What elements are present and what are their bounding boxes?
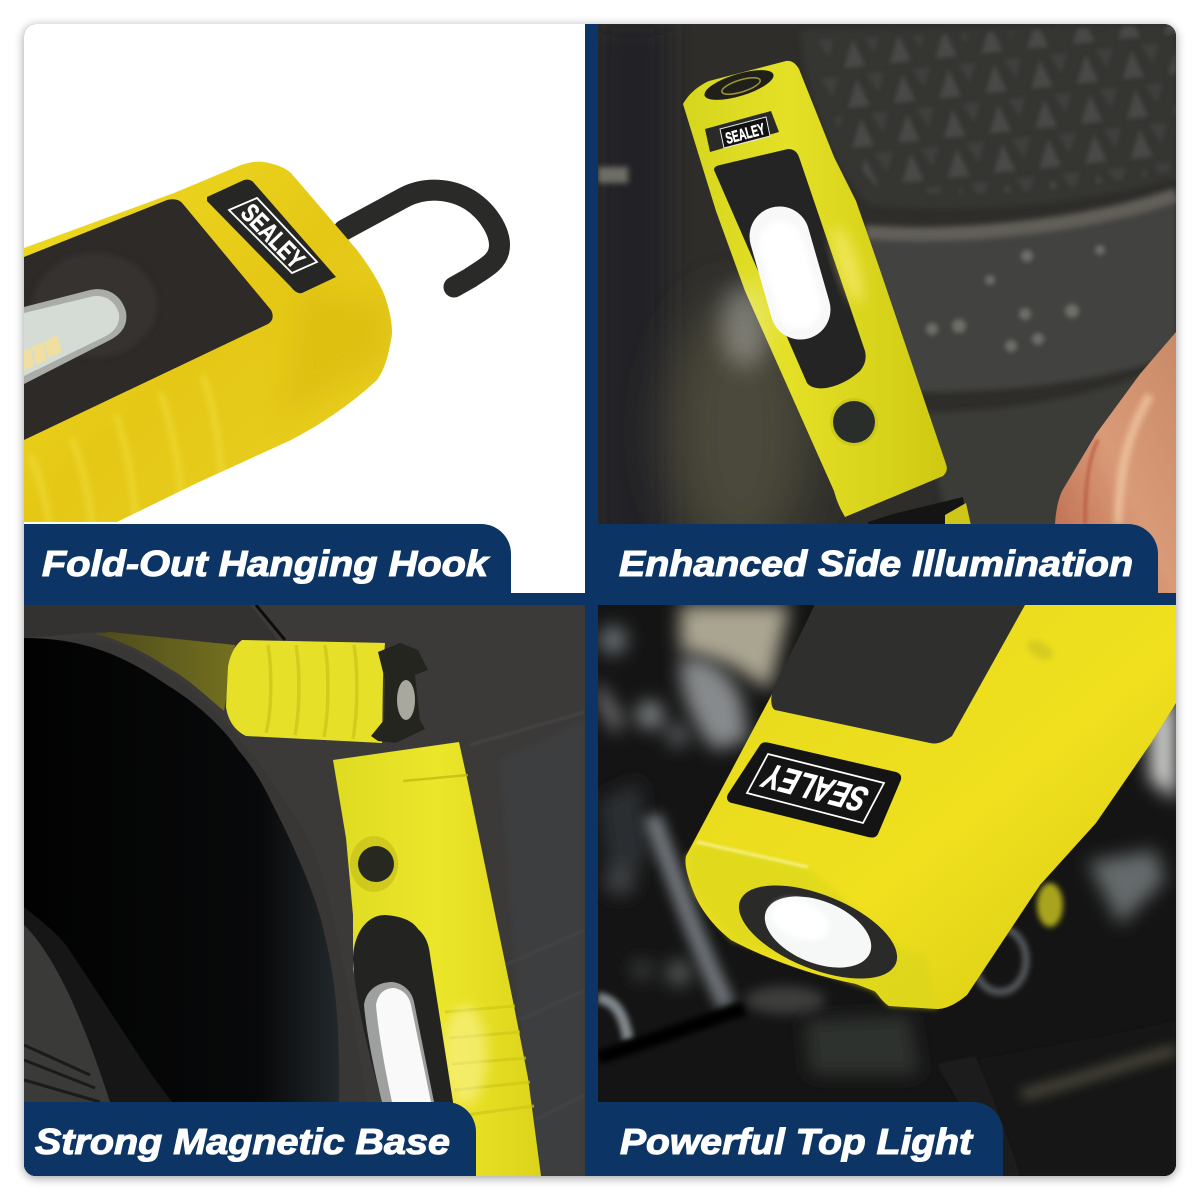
power button [830,398,878,446]
panel: fold-out hanging hook [24,24,585,593]
black panel [771,605,1025,744]
panel: powerful top light [598,605,1176,1176]
LED window [24,289,126,384]
engine tube [652,816,727,1006]
lower left pipe [598,998,628,1040]
grey ring part [974,928,1026,992]
caption: strong magnetic base: Strong Magnetic Base [35,1121,450,1162]
panel: enhanced side illumination [598,24,1176,593]
light glow [721,283,769,367]
SEALEY badge: SEALEY [755,756,875,819]
glow behind torch [670,300,810,560]
panel: strong magnetic base [24,605,585,1176]
left side shadow [600,26,666,524]
caption: powerful top light: Powerful Top Light [620,1121,974,1162]
hand highlights [1118,395,1150,524]
caption: enhanced side illumination: Enhanced Side Illumination [619,543,1133,584]
caption: fold-out hanging hook: Fold-Out Hanging Hook [42,543,490,584]
beige engine part [680,605,790,690]
fender dark seam [256,605,285,640]
body shading and ribs [30,290,391,530]
LED recess [36,258,154,352]
top lens [704,70,774,100]
SEALEY badge: SEALEY [235,198,311,274]
upper left wall [24,605,278,645]
black panel [353,915,460,1176]
black control panel [24,199,273,440]
torch body [24,162,392,522]
tyre [24,907,172,1176]
SEALEY badge: SEALEY [724,121,767,148]
lens [726,866,910,998]
upper tyre [800,24,1176,209]
tyre grooves [24,1045,100,1102]
light haze [745,986,825,1014]
tyre tread face [24,925,110,1176]
magnetic base end [371,643,428,743]
side glow [827,224,869,306]
rib glow [443,1005,487,1105]
fender lip [24,1168,32,1176]
lower tyre [929,378,1136,524]
olive torch arm [96,632,235,711]
torch body [685,605,1176,1009]
power button [350,836,398,892]
LED chips [24,335,62,370]
SEALEY badge [705,111,779,152]
blurred engine details [598,626,1176,1075]
torch body [683,61,947,517]
background panel bands [471,712,584,965]
dark foreground cable [598,1008,745,1058]
lower right blue-grey wall [500,720,585,1176]
caption: powerful top light [586,1102,1003,1176]
icon: hook [344,190,499,287]
small light bar [598,167,628,183]
hose collar [937,1056,1020,1176]
front face shading [686,843,937,1009]
torch head [226,640,385,743]
base lens [397,680,415,720]
body crease line [403,775,468,781]
tyre highlight band [865,195,1176,234]
caption: enhanced side illumination [586,524,1158,593]
body ribs [445,1006,534,1116]
head ribs [266,645,357,739]
black panel [714,149,866,388]
wheel arch [24,638,339,1176]
hand [1055,332,1176,593]
caption: fold-out hanging hook [24,524,511,593]
tyre tread [815,24,1176,194]
caption: strong magnetic base [24,1102,476,1176]
yellow blurred part [1037,883,1063,927]
LED window [750,206,830,340]
LED window [364,982,434,1176]
torch foot [868,497,964,524]
SEALEY badge [207,180,336,293]
hose [937,1020,1176,1176]
SEALEY badge [727,742,901,838]
grey engine part [680,658,748,750]
middle tyre [860,195,1176,392]
torch body [333,742,541,1176]
rib mark [1024,636,1056,664]
front edge highlight [697,842,808,867]
bokeh highlights [926,245,1105,352]
next segment of torch [945,503,971,524]
hose highlight [1022,1050,1176,1095]
